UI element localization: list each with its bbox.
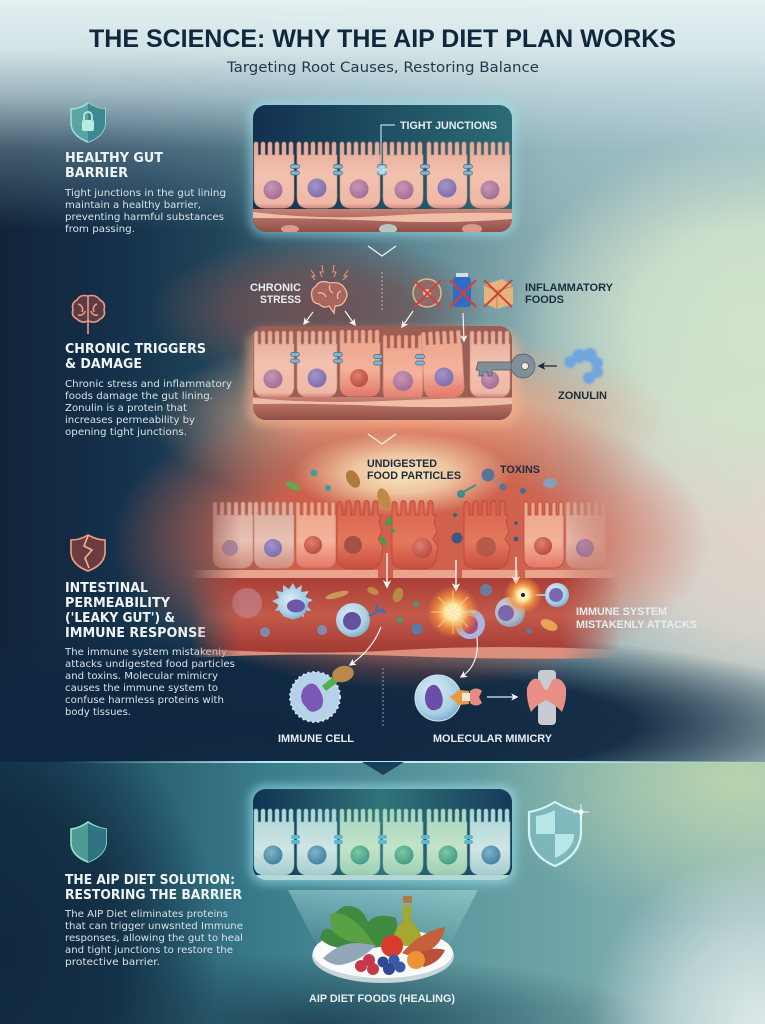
body text: and tight junctions to restore the	[65, 945, 233, 956]
subtitle: Targeting Root Causes, Restoring Balance	[226, 60, 539, 76]
chronic stress label: CHRONIC	[250, 282, 301, 294]
chronic stress label: STRESS	[260, 294, 301, 306]
icon: bread crossed	[484, 279, 513, 309]
immune cells in the lamina	[260, 583, 569, 639]
zonulin arrow	[539, 365, 557, 367]
diagram: leaky gut and immune zone	[190, 458, 697, 745]
heading: THE AIP DIET SOLUTION:	[65, 873, 235, 888]
dashed divider	[381, 272, 383, 311]
icon: brain	[72, 296, 104, 334]
immune system mistakenly attacks label: MISTAKENLY ATTACKS	[576, 619, 697, 631]
panel: damaged gut lining	[247, 265, 614, 426]
body text: confuse harmless proteins with	[65, 695, 224, 706]
AIP diet foods label: AIP DIET FOODS (HEALING)	[309, 993, 455, 1005]
section 1 text: healthy gut barrier	[64, 103, 226, 235]
body text: Chronic stress and inflammatory	[65, 379, 232, 390]
section divider with pointer	[60, 761, 765, 775]
body text: preventing harmful substances	[65, 212, 224, 223]
title: THE SCIENCE: WHY THE AIP DIET PLAN WORKS	[89, 25, 676, 53]
body text: causes the immune system to	[65, 683, 218, 694]
heading: PERMEABILITY	[65, 596, 171, 611]
section 2 text: chronic triggers	[65, 296, 232, 438]
molecular mimicry illustration	[415, 670, 566, 725]
inflammatory foods label: FOODS	[525, 294, 564, 306]
intestinal wall band	[190, 500, 620, 659]
food arrows	[402, 311, 464, 341]
body text: protective barrier.	[65, 957, 160, 968]
undigested food particles label: UNDIGESTED	[367, 458, 437, 470]
icon: lock shield	[71, 103, 105, 142]
heading: BARRIER	[65, 166, 128, 181]
heading: RESTORING THE BARRIER	[65, 888, 242, 903]
body text: maintain a healthy barrier,	[65, 200, 201, 211]
inflammatory foods label: INFLAMMATORY	[525, 282, 614, 294]
icon: broken shield	[71, 535, 105, 571]
body text: Zonulin is a protein that	[65, 403, 187, 414]
icon: zonulin protein	[564, 348, 603, 384]
zonulin label: ZONULIN	[558, 390, 607, 402]
body text: foods damage the gut lining.	[65, 391, 213, 402]
immune cell label: IMMUNE CELL	[278, 733, 354, 745]
body text: attacks undigested food particles	[65, 659, 235, 670]
toxins label: TOXINS	[500, 464, 540, 476]
body text: opening tight junctions.	[65, 427, 187, 438]
heading: CHRONIC TRIGGERS	[65, 342, 206, 357]
body text: increases permeability by	[65, 415, 195, 426]
immune attack bursts	[427, 576, 542, 638]
icon: green shield	[71, 822, 106, 862]
chevron arrow	[368, 434, 396, 444]
panel: healthy gut lining	[249, 101, 516, 236]
immune system mistakenly attacks label: IMMUNE SYSTEM	[576, 606, 667, 618]
leak arrows	[387, 553, 516, 590]
body text: The immune system mistakenly	[64, 647, 227, 658]
body text: from passing.	[65, 224, 135, 235]
page background: solution section	[0, 762, 765, 1024]
curved arrows	[350, 627, 477, 677]
icon: stress brain	[311, 265, 348, 313]
molecular mimicry label: MOLECULAR MIMICRY	[433, 733, 553, 745]
body text: body tissues.	[65, 707, 131, 718]
undigested food particles label: FOOD PARTICLES	[367, 470, 461, 482]
section 3 text: intestinal permeability	[64, 535, 235, 718]
tight junctions label	[381, 120, 497, 164]
immune cell illustration	[290, 663, 356, 722]
body text: Tight junctions in the gut lining	[64, 188, 226, 199]
heading: INTESTINAL	[65, 581, 148, 596]
body text: The AIP Diet eliminates proteins	[64, 909, 228, 920]
body text: responses, allowing the gut to heal	[65, 933, 243, 944]
section 4 text: the AIP diet solution	[64, 822, 243, 968]
light beam to plate	[288, 890, 478, 948]
food particle and toxin scatter	[285, 468, 557, 547]
heading: & DAMAGE	[65, 357, 142, 372]
illustration: AIP diet foods plate	[312, 896, 454, 983]
heading: IMMUNE RESPONSE	[65, 626, 206, 641]
dashed divider	[382, 668, 384, 727]
stress arrows	[304, 311, 355, 325]
page background: upper sections	[0, 0, 765, 762]
heading: ('LEAKY GUT') &	[65, 611, 175, 626]
body text: that can trigger unwsnted Immune	[65, 921, 243, 932]
icon: soda can crossed	[450, 273, 476, 307]
panel: restored gut lining	[249, 785, 516, 884]
icon: key	[476, 354, 535, 378]
icon: large glowing shield	[529, 802, 589, 866]
body text: and toxins. Molecular mimicry	[65, 671, 218, 682]
heading: HEALTHY GUT	[65, 151, 163, 166]
chevron arrow	[368, 246, 396, 256]
icon: donut crossed	[413, 279, 441, 307]
tight junctions label: TIGHT JUNCTIONS	[400, 120, 497, 132]
